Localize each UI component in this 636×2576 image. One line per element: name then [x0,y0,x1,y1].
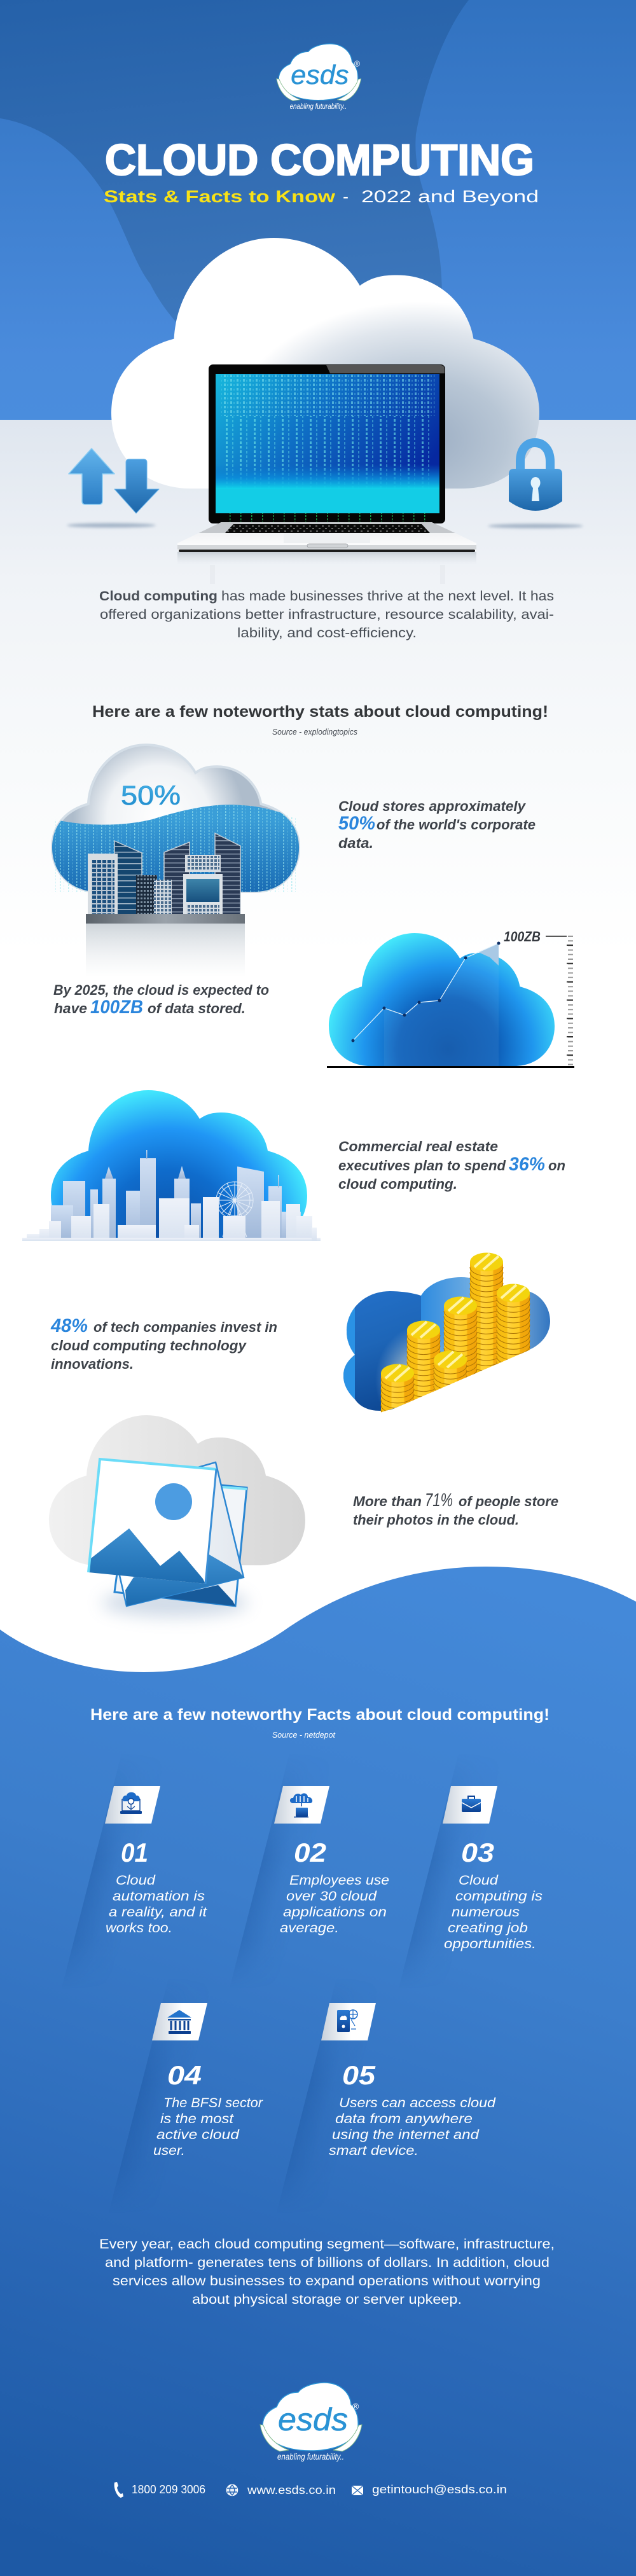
logo: esds top: ® [354,60,360,69]
laptop reflection [177,552,476,565]
icon: padlock [488,443,583,528]
intro text: lability, and cost-efficiency. [237,626,417,641]
stat: 36%: executives plan to spend [338,1158,506,1174]
front photo [88,1459,216,1584]
fact text 02: over 30 cloud [286,1889,377,1904]
stat: 100ZB: have [54,1001,87,1016]
contact: website: www.esds.co.in [247,2484,336,2496]
subtitle [104,187,539,206]
stat: 100ZB [53,982,269,1018]
panel: facts background wave [0,1567,636,2576]
stat: 36%: on [548,1158,565,1174]
fact text 01 [106,1873,207,1935]
closing text: and platform- generates tens of billions of dollars. In addition, cloud [105,2255,550,2270]
fact 05 [321,2003,496,2158]
stat: 48%: innovations. [51,1356,134,1372]
stat: 71%: of people store [459,1493,558,1509]
number 05: 05 [342,2060,376,2090]
source: facts: Source - netdepot [272,1730,336,1740]
fact text 05: Users can access cloud [339,2096,496,2110]
illustration: cloud with buildings 50% [52,745,299,978]
icon: cloud automation [105,1786,160,1824]
50% label: 50% [121,780,181,811]
buildings reflection [86,924,245,978]
icon: envelope [352,2486,363,2495]
logo: esds footer: ® [352,2401,359,2411]
illustration: coin stacks on cloud [343,1253,550,1412]
stat: 100ZB: 100ZB [90,997,143,1018]
stat: 36%: Commercial real estate [338,1139,498,1154]
background: top blue panel [0,0,636,420]
contact: phone [114,2482,205,2498]
fact text 03: computing is [455,1889,543,1904]
fact text 04: active cloud [156,2128,240,2142]
fact text 02: Employees use [289,1873,389,1888]
stat: 36%: cloud computing. [338,1176,457,1192]
fact text 04: is the most [160,2112,234,2126]
stat: 50%: of the world's corporate [377,817,536,833]
fact text 03: numerous [452,1905,520,1920]
icon: phone [114,2482,123,2498]
logo: esds footer [260,2383,362,2462]
number 03: 03 [461,1838,494,1867]
fact 01 [105,1786,207,1935]
stat: 71%: their photos in the cloud. [353,1512,519,1528]
fact text 02 [280,1873,389,1935]
fact text 01: automation is [113,1889,205,1904]
fact text 03 [444,1873,543,1951]
skyline front [22,1197,321,1241]
number 02: 02 [294,1838,326,1867]
fact text 04: user. [153,2143,185,2158]
fact 03 [443,1786,543,1951]
hero cloud [111,238,539,488]
icon: smart device access [321,2003,376,2040]
hinge [198,522,455,533]
middle photo [102,1462,244,1606]
back photo [114,1476,247,1606]
icon: upload and download arrows [67,448,159,528]
intro text: has made businesses thrive at the next level. It has [221,589,554,604]
closing text: Every year, each cloud computing segment—software, infrastructure, [99,2237,555,2252]
illustration: photos on gray cloud [49,1415,305,1617]
stat: 71%: More than [353,1493,422,1509]
number 04: 04 [167,2060,202,2090]
stat: 100ZB: of data stored. [148,1001,245,1016]
closing text [99,2237,555,2307]
logo: esds top: esds [291,60,349,90]
fact 02 [274,1786,389,1935]
fact text 01: Cloud [116,1873,156,1888]
icon: globe [226,2484,238,2496]
fact text 05: using the internet and [332,2128,480,2142]
intro text [99,589,554,641]
stat: 48%: 48% [50,1315,88,1336]
intro text: offered organizations better infrastructure, resource scalability, avai- [100,607,554,622]
keyboard [225,524,430,533]
number 01: 01 [121,1838,148,1867]
source: stats: Source - explodingtopics [272,727,357,737]
fact text 03: Cloud [459,1873,499,1888]
closing text: services allow businesses to expand operations without worrying [113,2274,541,2289]
intro text: Cloud computing [99,589,218,604]
heading: stats: Here are a few noteworthy stats about cloud computing! [92,703,548,721]
base [177,533,476,551]
heading: facts: Here are a few noteworthy Facts about cloud computing! [90,1706,550,1724]
stat: 100ZB: By 2025, the cloud is expected to [53,982,269,998]
fact text 05: data from anywhere [335,2112,473,2126]
coin cloud [343,1277,550,1411]
fact text 01: works too. [106,1921,172,1935]
fact shadow strips [70,1796,454,2176]
logo: esds footer: enabling futurability.. [277,2451,344,2462]
stat: 50%: data. [338,835,373,851]
fact text 03: opportunities. [444,1937,536,1951]
background: light ground [0,420,636,1628]
logo: esds top [277,44,361,111]
fact text 02: average. [280,1921,339,1935]
fact text 04: The BFSI sector [163,2096,263,2110]
stat: 71% [353,1490,558,1528]
icon: cloud applications [274,1786,329,1824]
stat: 36%: 36% [509,1154,545,1175]
subtitle: - [343,187,349,206]
icon: bank building [152,2003,207,2040]
100ZB label: 100ZB [504,929,541,945]
icon: briefcase [443,1786,497,1824]
illustration: city skyline cloud [22,1090,321,1241]
fact 04 [152,2003,263,2158]
fact text 04 [153,2096,263,2158]
stat: 50% [338,798,536,851]
skyline back [51,1150,301,1241]
lid [209,364,445,523]
screen [216,374,439,522]
contact: phone: 1800 209 3006 [132,2483,205,2496]
stat: 50%: 50% [338,813,375,834]
fact text 05 [329,2096,496,2158]
fact text 03: creating job [448,1921,528,1935]
stat: 71%: 71% [425,1490,453,1511]
stat: 36% [338,1139,565,1192]
subtitle: Stats & Facts to Know [104,187,336,206]
fact text 02: applications on [283,1905,387,1920]
ferris wheel [216,1182,253,1237]
chart: cloud line chart to 100ZB [327,929,574,1068]
logo: esds footer: esds [278,2402,348,2437]
coin stacks [380,1253,530,1412]
stat: 48%: of tech companies invest in [93,1319,277,1335]
fact text 05: smart device. [329,2143,418,2158]
fact text 01: a reality, and it [109,1905,207,1920]
contact: email: getintouch@esds.co.in [372,2483,507,2496]
closing text: about physical storage or server upkeep. [192,2292,462,2307]
logo: esds top: enabling futurability.. [290,102,347,111]
stat: 48%: cloud computing technology [51,1338,247,1354]
stat: 50%: Cloud stores approximately [338,798,527,814]
laptop [177,364,476,584]
stat: 48% [50,1315,277,1372]
title: CLOUD COMPUTING [105,135,534,184]
subtitle: 2022 and Beyond [361,187,539,206]
buildings [86,833,245,924]
